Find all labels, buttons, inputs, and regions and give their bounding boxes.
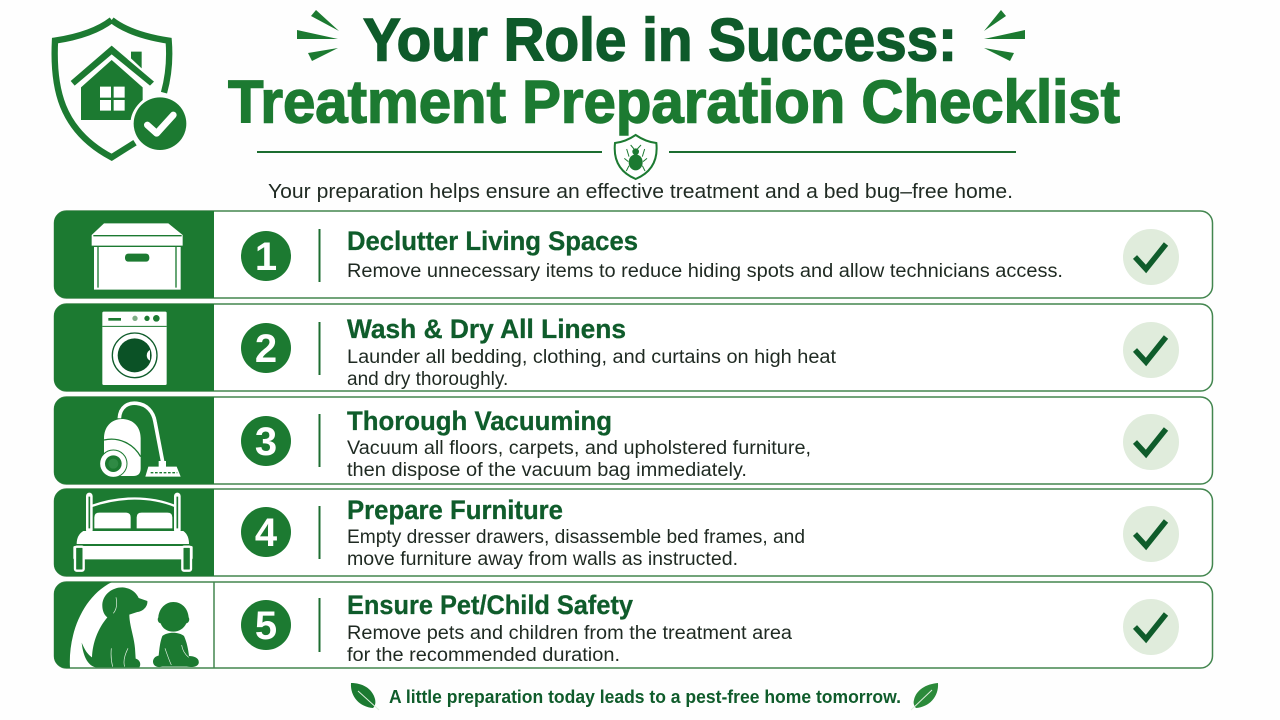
icon: left burst: [297, 10, 339, 61]
step 2 check: [1123, 322, 1179, 378]
title: Treatment Preparation Checklist: [228, 68, 1120, 136]
icon: dog and child: [82, 587, 199, 667]
step 3 heading: Thorough Vacuuming: [347, 406, 612, 436]
icon: bed: [73, 496, 193, 571]
icon: shield with house and check: [55, 20, 186, 157]
step 2 description: Launder all bedding, clothing, and curtains on high heat: [347, 347, 837, 368]
step 3 check: [1123, 414, 1179, 470]
number 3: [241, 416, 291, 466]
icon: storage box: [92, 223, 183, 290]
title: [228, 6, 1120, 136]
step 1 check: [1123, 229, 1179, 285]
title divider with bug shield: [257, 135, 1016, 179]
step 2 description: and dry thoroughly.: [347, 369, 508, 390]
number 4: [241, 507, 291, 557]
step 1 description: Remove unnecessary items to reduce hiding spots and allow technicians access.: [347, 261, 1063, 282]
panel: step 5 safety: [54, 582, 1212, 668]
panel: step 4 furniture: [54, 489, 1212, 576]
step 5 description: for the recommended duration.: [347, 645, 620, 666]
step 3 description: [347, 438, 811, 481]
number 5: [241, 600, 291, 650]
icon: left leaf: [351, 683, 379, 710]
icon: right burst: [984, 10, 1025, 61]
number 1: 1: [255, 235, 277, 279]
step 4 check: [1123, 506, 1179, 562]
step 3 description: Vacuum all floors, carpets, and upholstered furniture,: [347, 438, 811, 459]
step 3 description: then dispose of the vacuum bag immediately.: [347, 460, 747, 481]
icon: right leaf: [911, 683, 938, 710]
step 2 description: [347, 347, 837, 390]
panel: step 1 declutter: [54, 211, 1212, 298]
step 4 description: [347, 527, 805, 570]
number 2: 2: [255, 327, 277, 371]
number 5: 5: [255, 604, 277, 648]
step 4 description: Empty dresser drawers, disassemble bed frames, and: [347, 527, 805, 548]
number 3: 3: [255, 420, 277, 464]
step 5 description: Remove pets and children from the treatment area: [347, 623, 792, 644]
step 4 heading: Prepare Furniture: [347, 495, 563, 525]
step 5 heading: Ensure Pet/Child Safety: [347, 590, 633, 620]
panel: step 2 wash: [54, 304, 1212, 391]
panel: step 3 vacuum: [54, 397, 1212, 484]
title: Your Role in Success:: [363, 6, 957, 74]
icon: washing machine: [102, 312, 167, 385]
step 5 description: [347, 623, 792, 666]
icon: vacuum cleaner: [100, 403, 181, 477]
step 1 heading: Declutter Living Spaces: [347, 226, 638, 256]
step 4 description: move furniture away from walls as instructed.: [347, 549, 738, 570]
number 4: 4: [255, 511, 278, 555]
subtitle: Your preparation helps ensure an effective treatment and a bed bug–free home.: [268, 181, 1013, 203]
step 5 check: [1123, 599, 1179, 655]
step 2 heading: Wash & Dry All Linens: [347, 314, 626, 344]
footer tagline: A little preparation today leads to a pest-free home tomorrow.: [389, 687, 901, 707]
number 2: [241, 323, 291, 373]
icon: bed bug shield: [615, 135, 657, 179]
number 1: [241, 231, 291, 281]
